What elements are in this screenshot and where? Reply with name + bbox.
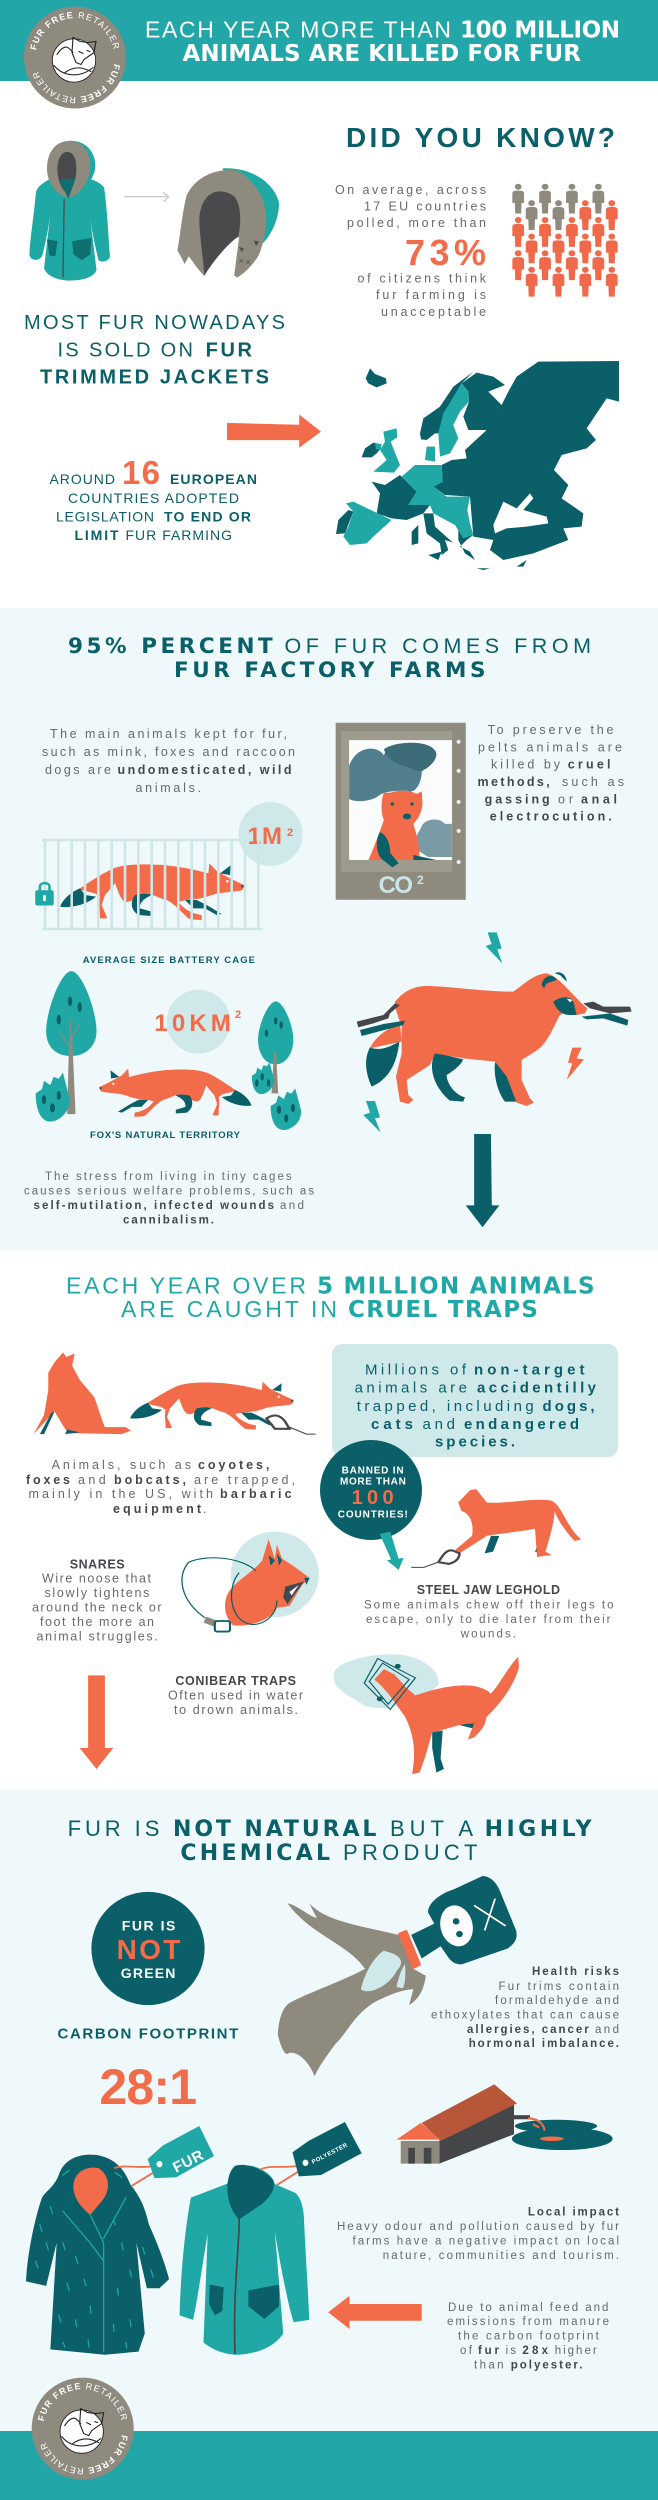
text: steel jaw leghold: wounds. <box>460 1628 516 1640</box>
text: cruel methods: anal <box>581 793 617 807</box>
text: snares <box>32 1557 162 1644</box>
text: cruel methods: To preserve the <box>488 723 614 737</box>
text: carbon footprint explanation: than <box>474 2359 504 2371</box>
heading: factory farms <box>68 634 591 683</box>
text: barbaric equipment: foxes <box>26 1473 70 1487</box>
callout: non-target animals <box>332 1344 618 1457</box>
label: 10 square kilometres: 10KM <box>154 1010 231 1037</box>
text: health risks: ethoxylates that can cause <box>431 2010 619 2022</box>
text: most fur nowadays: MOST FUR NOWADAYS <box>24 312 285 334</box>
text: cruel methods: electrocution. <box>490 810 612 824</box>
callout: non-target animals: non-target <box>474 1362 584 1378</box>
text: stress from tiny cages: self-mutilation, infected wounds <box>34 1200 274 1212</box>
text: carbon footprint explanation: 28x <box>522 2345 549 2357</box>
text: barbaric equipment: . <box>203 1502 206 1516</box>
illustration: lynx in snare <box>182 1532 319 1632</box>
text: cruel methods: pelts animals are <box>478 740 622 754</box>
text: cruel methods: methods, <box>478 775 550 789</box>
text: main animals kept: animals. <box>136 781 201 795</box>
text: conibear traps <box>168 1674 303 1717</box>
text: health risks: hormonal imbalance. <box>469 2038 619 2050</box>
text: barbaric equipment: coyotes, <box>198 1458 269 1472</box>
heading: chemical product: PRODUCT <box>343 1840 478 1865</box>
text: barbaric equipment: barbaric <box>220 1487 292 1501</box>
illustration: animal in conibear trap <box>333 1654 519 1774</box>
text: 16 European countries: AROUND <box>50 471 115 487</box>
text: health risks: allergies, cancer <box>467 2024 589 2036</box>
badge: banned in 100 countries: MORE THAN <box>340 1477 406 1488</box>
icon: parka with fur trim <box>29 141 110 281</box>
text: cruel methods <box>478 723 624 824</box>
text: main animals kept <box>42 727 295 795</box>
arrow: to leghold trap <box>380 1532 404 1570</box>
title: 100 MILLION <box>460 18 620 44</box>
label: CO2: 2 <box>417 873 424 887</box>
text: barbaric equipment: are trapped, <box>194 1473 295 1487</box>
title <box>145 16 620 67</box>
text: local impact <box>337 2207 619 2262</box>
text: cruel methods: such as <box>562 775 624 789</box>
badge: footer fur free retailer: FUR FREE RETAILER <box>40 2435 128 2474</box>
text: snares: SNARES <box>70 1557 125 1571</box>
heading: traps: ARE CAUGHT IN <box>121 1296 337 1322</box>
heading: factory farms: 95% PERCENT <box>68 634 273 659</box>
arrow: down dark <box>466 1134 499 1227</box>
label: natural territory: FOX'S NATURAL TERRITORY <box>90 1130 241 1141</box>
icons: lightning bolts <box>363 932 584 1133</box>
text: steel jaw leghold <box>364 1583 614 1640</box>
stat: 28 to 1: 28:1 <box>99 2059 197 2115</box>
text: stress from tiny cages: and <box>280 1200 304 1212</box>
arrow: down orange <box>80 1675 113 1769</box>
text: 73 percent statistic: polled, more than <box>347 216 486 230</box>
text: health risks: formaldehyde and <box>495 1995 619 2007</box>
badge: banned in 100 countries: 100 <box>352 1487 394 1509</box>
text: carbon footprint explanation: fur <box>478 2345 500 2357</box>
text: local impact: farms have a negative impact on local <box>352 2236 619 2248</box>
title: EACH YEAR MORE THAN <box>145 16 451 42</box>
callout: non-target animals: Millions of <box>365 1362 467 1378</box>
text: local impact: nature, communities and tourism. <box>383 2250 619 2262</box>
panel: chemical product background <box>0 1790 658 2431</box>
heading: chemical product: CHEMICAL <box>180 1841 330 1866</box>
text: snares: foot the more an <box>40 1615 154 1629</box>
badge: fur free retailer: FUR FREE RETAILER <box>30 12 120 50</box>
text: local impact: Local impact <box>528 2207 619 2219</box>
text: 16 European countries: LIMIT <box>74 527 119 543</box>
heading: factory farms: FUR FACTORY FARMS <box>174 658 486 683</box>
text: barbaric equipment <box>26 1458 295 1516</box>
badge: footer fur free retailer: FUR FREE RETAILER <box>38 2382 127 2421</box>
arrow: jacket to collar <box>124 192 169 202</box>
pictogram: people <box>512 184 618 297</box>
map of Europe <box>336 361 619 570</box>
text: carbon footprint explanation: of <box>460 2345 473 2357</box>
circle: 1 square metre: 2 <box>287 827 293 839</box>
callout: non-target animals: dogs, <box>542 1398 595 1415</box>
text: health risks: and <box>595 2024 619 2036</box>
text: 73 percent statistic: unacceptable <box>381 305 486 319</box>
heading: traps: EACH YEAR OVER <box>66 1272 306 1298</box>
text: most fur nowadays: FUR <box>206 340 253 362</box>
text: 73 percent statistic: 73% <box>405 232 486 273</box>
text: most fur nowadays <box>24 312 285 388</box>
text: conibear traps: to drown animals. <box>174 1703 298 1717</box>
illustration: fur coat with tag <box>26 2126 214 2355</box>
label: carbon footprint: CARBON FOOTPRINT <box>58 2026 238 2043</box>
text: barbaric equipment: bobcats, <box>114 1473 186 1487</box>
text: cruel methods: cruel <box>568 758 610 772</box>
text: main animals kept: The main animals kept for fur, <box>50 727 287 741</box>
text: barbaric equipment: and <box>78 1473 106 1487</box>
callout: non-target animals: species. <box>435 1434 515 1451</box>
text: main animals kept: such as mink, foxes and raccoon <box>42 745 295 759</box>
text: carbon footprint explanation: is <box>506 2345 516 2357</box>
text: health risks: Fur trims contain <box>498 1981 619 1993</box>
footer band <box>0 2431 658 2500</box>
heading: traps: CRUEL TRAPS <box>348 1297 538 1323</box>
badge: banned in 100 countries: BANNED IN <box>342 1465 404 1476</box>
text: cruel methods: killed by <box>491 758 561 772</box>
illustration: poison bottle on fur <box>278 1876 517 2076</box>
text: 16 European countries: TO END OR <box>164 508 251 524</box>
heading: traps: 5 MILLION ANIMALS <box>317 1274 595 1300</box>
text: conibear traps: Often used in water <box>168 1689 303 1703</box>
label: 10 square kilometres: 2 <box>235 1009 241 1021</box>
text: carbon footprint explanation: Due to animal feed and <box>448 2302 608 2314</box>
text: main animals kept: dogs are <box>45 763 111 777</box>
callout: non-target animals: cats <box>371 1416 413 1433</box>
text: steel jaw leghold: Some animals chew off their legs to <box>364 1599 614 1611</box>
text: 16 European countries: FUR FARMING <box>126 527 232 543</box>
illustration: electrocuted raccoon dog <box>357 972 632 1106</box>
text: most fur nowadays: IS SOLD ON <box>58 340 193 362</box>
text: health risks <box>431 1966 619 2050</box>
illustration: cat in leghold trap <box>411 1489 581 1567</box>
heading: factory farms: OF FUR COMES FROM <box>284 634 591 658</box>
label: fur tag: FUR <box>170 2147 206 2177</box>
callout: non-target animals: animals are <box>355 1380 467 1397</box>
heading: chemical product: BUT A <box>390 1816 473 1841</box>
icon: fur collar <box>177 168 279 277</box>
arrow: left orange <box>328 2296 422 2329</box>
circle: 1 square metre: 1M <box>248 823 282 850</box>
circle: 1 square metre <box>239 802 303 866</box>
badge: fur free retailer <box>24 6 126 108</box>
callout: non-target animals: endangered <box>464 1416 579 1433</box>
text: carbon footprint explanation: higher <box>555 2345 597 2357</box>
text: snares: slowly tightens <box>44 1586 149 1600</box>
label: polyester tag: POLYESTER <box>311 2142 349 2166</box>
heading: chemical product <box>68 1816 593 1866</box>
text: cruel methods: or <box>558 793 573 807</box>
badge: fur is not green <box>91 1892 205 2005</box>
badge: fur is not green: NOT <box>117 1934 180 1965</box>
text: 16 European countries: 16 <box>122 454 160 491</box>
text: 73 percent statistic: On average, across <box>335 183 486 197</box>
text: carbon footprint explanation: polyester. <box>511 2359 582 2371</box>
text: most fur nowadays: TRIMMED JACKETS <box>40 366 269 388</box>
heading: chemical product: HIGHLY <box>485 1817 593 1842</box>
heading: chemical product: NOT NATURAL <box>173 1817 376 1842</box>
text: 73 percent statistic: fur farming is <box>376 288 486 302</box>
text: stress from tiny cages: causes serious welfare problems, such as <box>24 1186 314 1198</box>
text: conibear traps: CONIBEAR TRAPS <box>175 1674 296 1688</box>
text: snares: around the neck or <box>32 1601 162 1615</box>
callout: non-target animals: and <box>422 1416 455 1433</box>
illustration: polyester jacket with tag <box>180 2122 362 2355</box>
text: 16 European countries: EUROPEAN <box>170 471 257 487</box>
text: snares: Wire noose that <box>42 1572 152 1586</box>
text: 73 percent statistic: of citizens think <box>358 272 487 286</box>
text: carbon footprint explanation <box>447 2302 609 2371</box>
badge: banned in 100 countries: COUNTRIES! <box>338 1510 408 1521</box>
arrow: to map <box>227 414 321 448</box>
header band <box>0 0 658 81</box>
text: cruel methods: gassing <box>485 793 550 807</box>
text: stress from tiny cages: The stress from living in tiny cages <box>45 1171 292 1183</box>
badge: footer fur free retailer <box>32 2378 134 2480</box>
text: carbon footprint explanation: emissions from manure <box>447 2316 609 2328</box>
text: steel jaw leghold: STEEL JAW LEGHOLD <box>417 1583 560 1597</box>
text: local impact: Heavy odour and pollution caused by fur <box>337 2221 619 2233</box>
badge: banned in 100 countries <box>320 1440 422 1540</box>
icon: padlock <box>35 883 54 906</box>
text: barbaric equipment: equipment <box>113 1502 202 1516</box>
label: battery cage: AVERAGE SIZE BATTERY CAGE <box>83 955 255 966</box>
text: barbaric equipment: Animals, such as <box>52 1458 191 1472</box>
illustration: caged fox <box>42 840 263 929</box>
illustration: polluting fur farm <box>397 2084 613 2164</box>
text: 16 European countries: COUNTRIES ADOPTED <box>68 490 239 506</box>
callout: non-target animals: trapped, including <box>357 1398 534 1415</box>
callout: non-target animals: accidentilly <box>477 1380 597 1397</box>
text: steel jaw leghold: escape, only to die later from their <box>366 1614 611 1626</box>
text: main animals kept: undomesticated, wild <box>118 763 292 777</box>
heading: traps <box>66 1272 595 1323</box>
text: carbon footprint explanation: the carbon footprint <box>458 2330 600 2342</box>
panel: factory farms background <box>0 608 658 1250</box>
text: barbaric equipment: mainly in the US, with <box>28 1487 213 1501</box>
text: 73 percent statistic: 17 EU countries <box>364 200 486 214</box>
label: CO2: CO <box>378 872 413 899</box>
heading: chemical product: FUR IS <box>68 1816 159 1841</box>
illustration: gas chamber <box>336 723 466 900</box>
text: stress from tiny cages <box>24 1171 314 1227</box>
text: 73 percent statistic <box>335 183 487 319</box>
badge: fur free retailer: FUR FREE RETAILER <box>33 64 120 104</box>
text: 16 European countries: LEGISLATION <box>56 508 154 524</box>
badge: fur is not green: FUR IS <box>122 1917 175 1933</box>
text: health risks: Health risks <box>532 1966 619 1978</box>
text: 16 European countries <box>50 454 257 543</box>
text: stress from tiny cages: cannibalism. <box>123 1215 214 1227</box>
badge: fur is not green: GREEN <box>121 1965 175 1981</box>
text: snares: animal struggles. <box>36 1630 158 1644</box>
illustration: coyote and trapped fox <box>34 1352 316 1434</box>
illustration: natural territory trees <box>36 971 301 1130</box>
title: ANIMALS ARE KILLED FOR FUR <box>182 41 581 67</box>
heading: did you know: DID YOU KNOW? <box>346 122 615 153</box>
